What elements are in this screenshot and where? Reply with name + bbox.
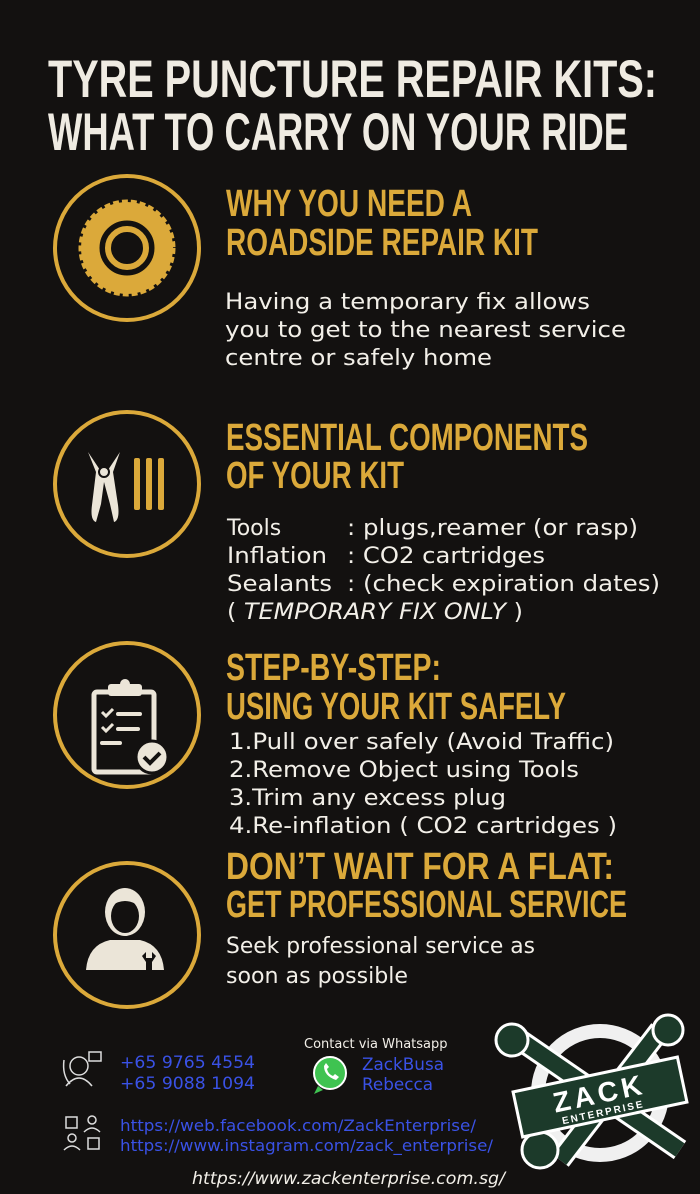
text: why body xyxy=(225,290,626,371)
heading: step by step: STEP-BY-STEP: xyxy=(226,647,441,689)
list: kit components: : CO2 cartridges xyxy=(347,544,545,569)
heading: step by step xyxy=(226,647,566,728)
icon: tyre xyxy=(55,176,199,320)
icon: mechanic xyxy=(55,863,199,1007)
list: kit components: Inflation xyxy=(227,544,327,569)
text: professional service: Seek professional service as xyxy=(226,934,535,959)
social links: https://www.instagram.com/zack_enterprise/ xyxy=(120,1136,494,1156)
heading: don't wait xyxy=(226,846,627,926)
list: kit components: : plugs,reamer (or rasp) xyxy=(347,516,638,541)
heading: step by step: USING YOUR KIT SAFELY xyxy=(226,686,566,728)
text: professional service: soon as possible xyxy=(226,964,408,989)
social links: https://web.facebook.com/ZackEnterprise/ xyxy=(120,1116,477,1135)
whatsapp contact xyxy=(304,1037,448,1095)
heading: why you need xyxy=(226,183,538,264)
list: steps xyxy=(229,730,617,839)
icon: social xyxy=(64,1116,100,1150)
phone numbers: +65 9088 1094 xyxy=(120,1074,255,1094)
heading: why you need: WHY YOU NEED A xyxy=(226,183,472,225)
list: kit components xyxy=(226,516,660,625)
heading: essential components xyxy=(226,417,588,497)
whatsapp contact: Contact via Whatsapp xyxy=(304,1037,448,1052)
heading: essential components: OF YOUR KIT xyxy=(226,455,404,497)
logo xyxy=(496,1015,687,1168)
text: why body: Having a temporary fix allows xyxy=(225,290,590,315)
list: kit components: ( TEMPORARY FIX ONLY ) xyxy=(227,600,523,625)
social links xyxy=(120,1116,494,1156)
list: steps: 4.Re-inflation ( CO2 cartridges ) xyxy=(229,814,617,839)
text: professional service xyxy=(226,934,535,989)
whatsapp contact: ZackBusa xyxy=(362,1055,444,1075)
icon: pliers and plugs xyxy=(55,412,199,556)
logo: ENTERPRISE xyxy=(561,1099,646,1127)
list: steps: 2.Remove Object using Tools xyxy=(229,758,579,783)
website: https://www.zackenterprise.com.sg/ xyxy=(192,1169,507,1189)
list: steps: 3.Trim any excess plug xyxy=(229,786,506,811)
whatsapp contact: Rebecca xyxy=(362,1075,433,1095)
phone numbers xyxy=(120,1053,255,1094)
logo: ZACK xyxy=(550,1069,648,1118)
heading: why you need: ROADSIDE REPAIR KIT xyxy=(226,222,538,264)
phone numbers: +65 9765 4554 xyxy=(120,1053,255,1073)
icon: checklist xyxy=(55,643,199,787)
icon: phone support xyxy=(64,1052,101,1086)
text: why body: centre or safely home xyxy=(225,346,492,371)
heading: don't wait: DON’T WAIT FOR A FLAT: xyxy=(226,846,614,888)
list: kit components: Tools xyxy=(226,516,281,541)
list: kit components: : (check expiration dates) xyxy=(347,572,660,597)
list: kit components: Sealants xyxy=(227,572,332,597)
list: steps: 1.Pull over safely (Avoid Traffic) xyxy=(229,730,614,755)
title xyxy=(48,50,657,162)
text: why body: you to get to the nearest service xyxy=(225,318,626,343)
